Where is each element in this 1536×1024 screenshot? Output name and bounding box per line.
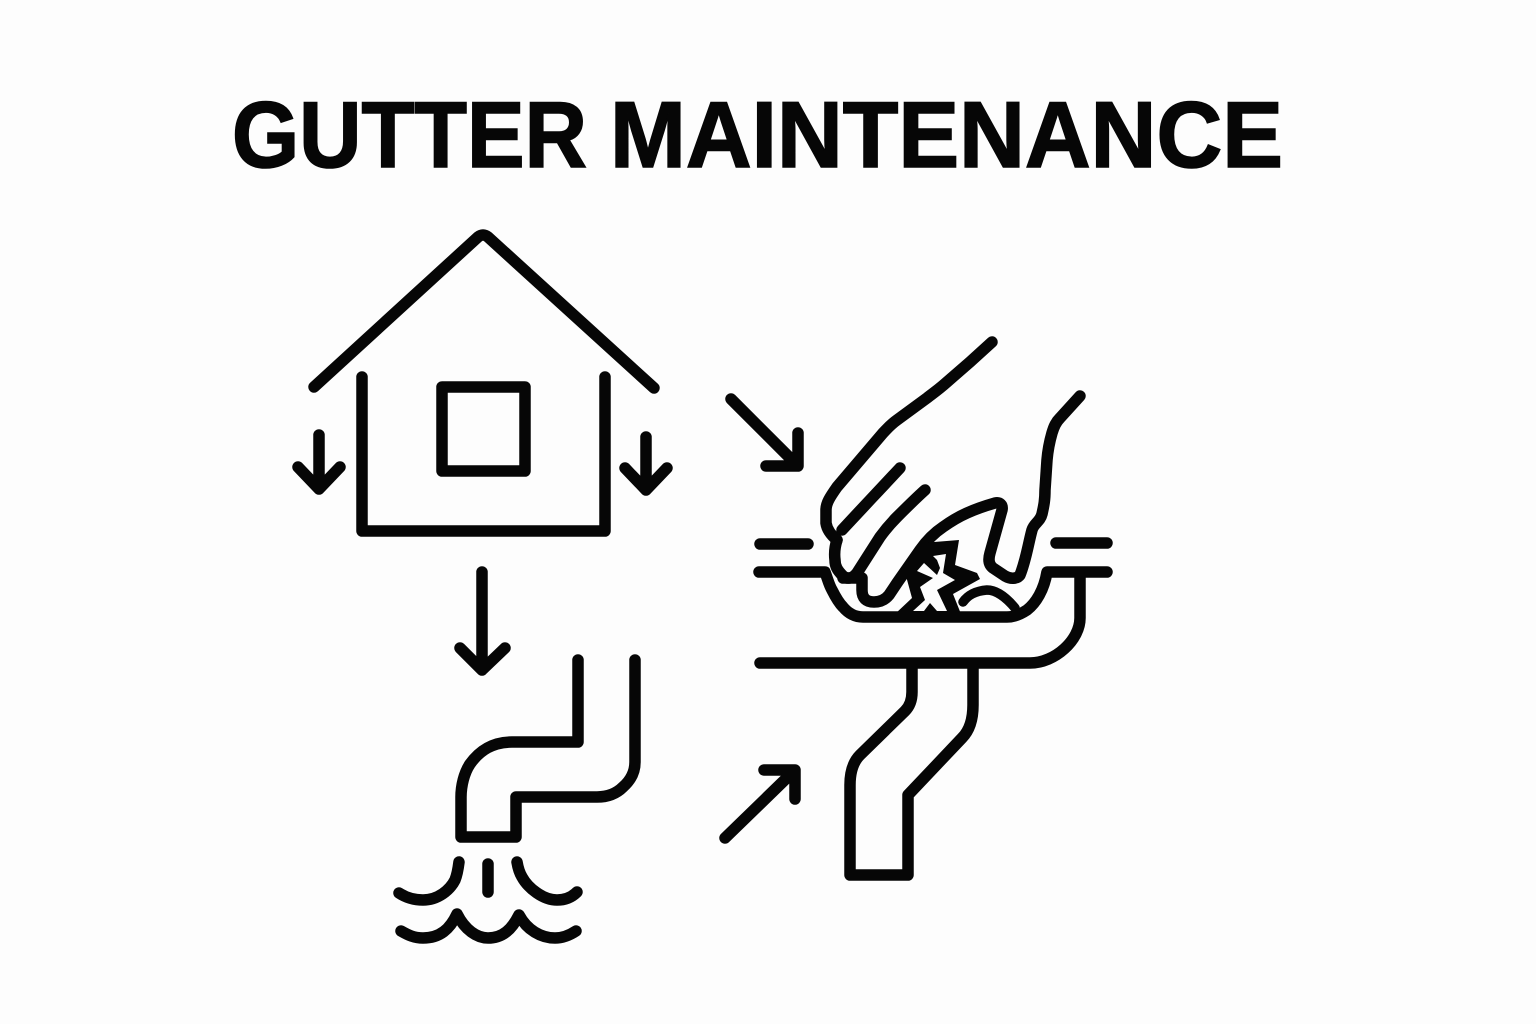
arrow: right of house, down [625, 437, 667, 490]
arrow: toward downspout [725, 770, 795, 838]
icon: water splash [399, 862, 577, 938]
icon: downspout [850, 668, 973, 875]
title: MAINTENANCE [610, 82, 1283, 187]
arrow: toward hand in gutter [731, 399, 798, 466]
icon: house [314, 235, 654, 531]
title [232, 82, 1283, 187]
title: GUTTER [232, 82, 587, 187]
arrow: house to downspout [460, 572, 505, 670]
icon: hand clearing debris [826, 342, 1080, 602]
arrow: left of house, down [298, 435, 340, 489]
icon: downspout outlet [461, 660, 635, 837]
icon: debris in gutter [895, 540, 1015, 614]
icon: gutter channel [759, 543, 1107, 663]
